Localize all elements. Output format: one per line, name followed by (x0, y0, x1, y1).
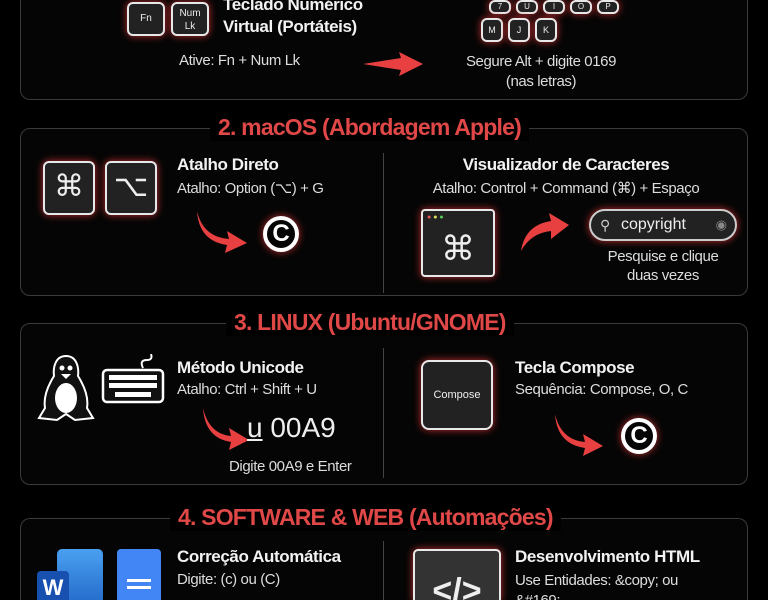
icon: Num Lk key (171, 2, 209, 36)
arrow (203, 408, 248, 450)
search field: copyright (621, 216, 686, 233)
arrow (363, 52, 423, 76)
icon: command key: ⌘ (54, 170, 84, 203)
text: digite 00A9: Digite 00A9 e Enter (229, 458, 351, 475)
icon: code window (413, 549, 501, 600)
heading: correcao: Correção Automática (177, 547, 341, 566)
icon: letter keys: M (488, 25, 496, 35)
text: pesquise (608, 248, 718, 284)
text: segure alt (466, 53, 616, 90)
arrow (197, 211, 247, 253)
icon: viewer window: ● ● ● (427, 214, 444, 221)
heading: metodo unicode: Método Unicode (177, 358, 304, 377)
arrow (521, 213, 569, 251)
icon: letter keys: 7 (498, 2, 502, 11)
icon: compose key: Compose (433, 389, 481, 401)
text: u 00A9: u 00A9 (247, 412, 336, 443)
text: ative: Ative: Fn + Num Lk (179, 52, 300, 69)
search field (589, 209, 737, 241)
heading: teclado numerico (223, 0, 363, 36)
icon: word: W (43, 575, 63, 600)
text: pesquise: duas vezes (627, 267, 699, 284)
heading: html: Desenvolvimento HTML (515, 547, 700, 566)
panel: windows (20, 0, 748, 100)
text: digite c: Digite: (c) ou (C) (177, 571, 280, 588)
icon: command key (43, 161, 95, 215)
icon: viewer window: ⌘ (441, 230, 475, 268)
panel: software (20, 518, 748, 600)
icon: keyboard (102, 354, 164, 404)
icon: option key (105, 161, 157, 215)
icon: copyright: C (630, 422, 648, 449)
icon: Fn key: Fn (140, 13, 152, 24)
title: macOS: 2. macOS (Abordagem Apple) (218, 114, 521, 140)
heading: atalho direto: Atalho Direto (177, 155, 279, 174)
icon: letter keys: O (578, 2, 584, 11)
panel: linux (20, 323, 748, 485)
icon: docs (117, 549, 161, 600)
search field: ◉ (716, 217, 727, 232)
title: linux: 3. LINUX (Ubuntu/GNOME) (234, 309, 506, 335)
icon: letter keys: I (553, 2, 555, 11)
icon: copyright (263, 216, 299, 252)
title: software: 4. SOFTWARE & WEB (Automações) (178, 504, 553, 530)
arrow (555, 414, 603, 456)
icon: letter keys: P (605, 2, 611, 11)
text: pesquise: Pesquise e clique (608, 248, 718, 265)
text: option G: Atalho: Option (⌥) + G (177, 180, 323, 197)
icon: Num Lk key: Lk (185, 21, 195, 32)
icon: word (37, 549, 103, 600)
text: entidades (515, 572, 678, 600)
icon: Num Lk key: Num (179, 8, 201, 19)
icon: letter keys: U (524, 2, 530, 11)
icon: Fn key (127, 2, 165, 36)
icon: letter keys: J (517, 25, 521, 35)
icon: viewer window (421, 209, 495, 277)
icon: tux (37, 355, 95, 421)
heading: tecla compose: Tecla Compose (515, 358, 634, 377)
icon: letter keys (475, 0, 624, 48)
search field: ⚲ (600, 217, 610, 233)
icon: copyright: C (272, 220, 290, 247)
icon: option key: ⌥ (114, 170, 148, 203)
icon: compose key (421, 360, 493, 430)
text: ctrl shift u: Atalho: Ctrl + Shift + U (177, 381, 317, 398)
text: entidades: Use Entidades: &copy; ou (515, 572, 678, 589)
text: control command: Atalho: Control + Command (⌘) + Espaço (433, 180, 699, 197)
text: segure alt: (nas letras) (506, 73, 576, 90)
heading: visualizador: Visualizador de Caracteres (463, 155, 669, 174)
heading: teclado numerico: Virtual (Portáteis) (223, 17, 357, 36)
text: sequencia: Sequência: Compose, O, C (515, 381, 688, 398)
panel: macOS (20, 128, 748, 296)
text: segure alt: Segure Alt + digite 0169 (466, 53, 616, 70)
icon: letter keys: K (543, 25, 549, 35)
icon: copyright (621, 418, 657, 454)
